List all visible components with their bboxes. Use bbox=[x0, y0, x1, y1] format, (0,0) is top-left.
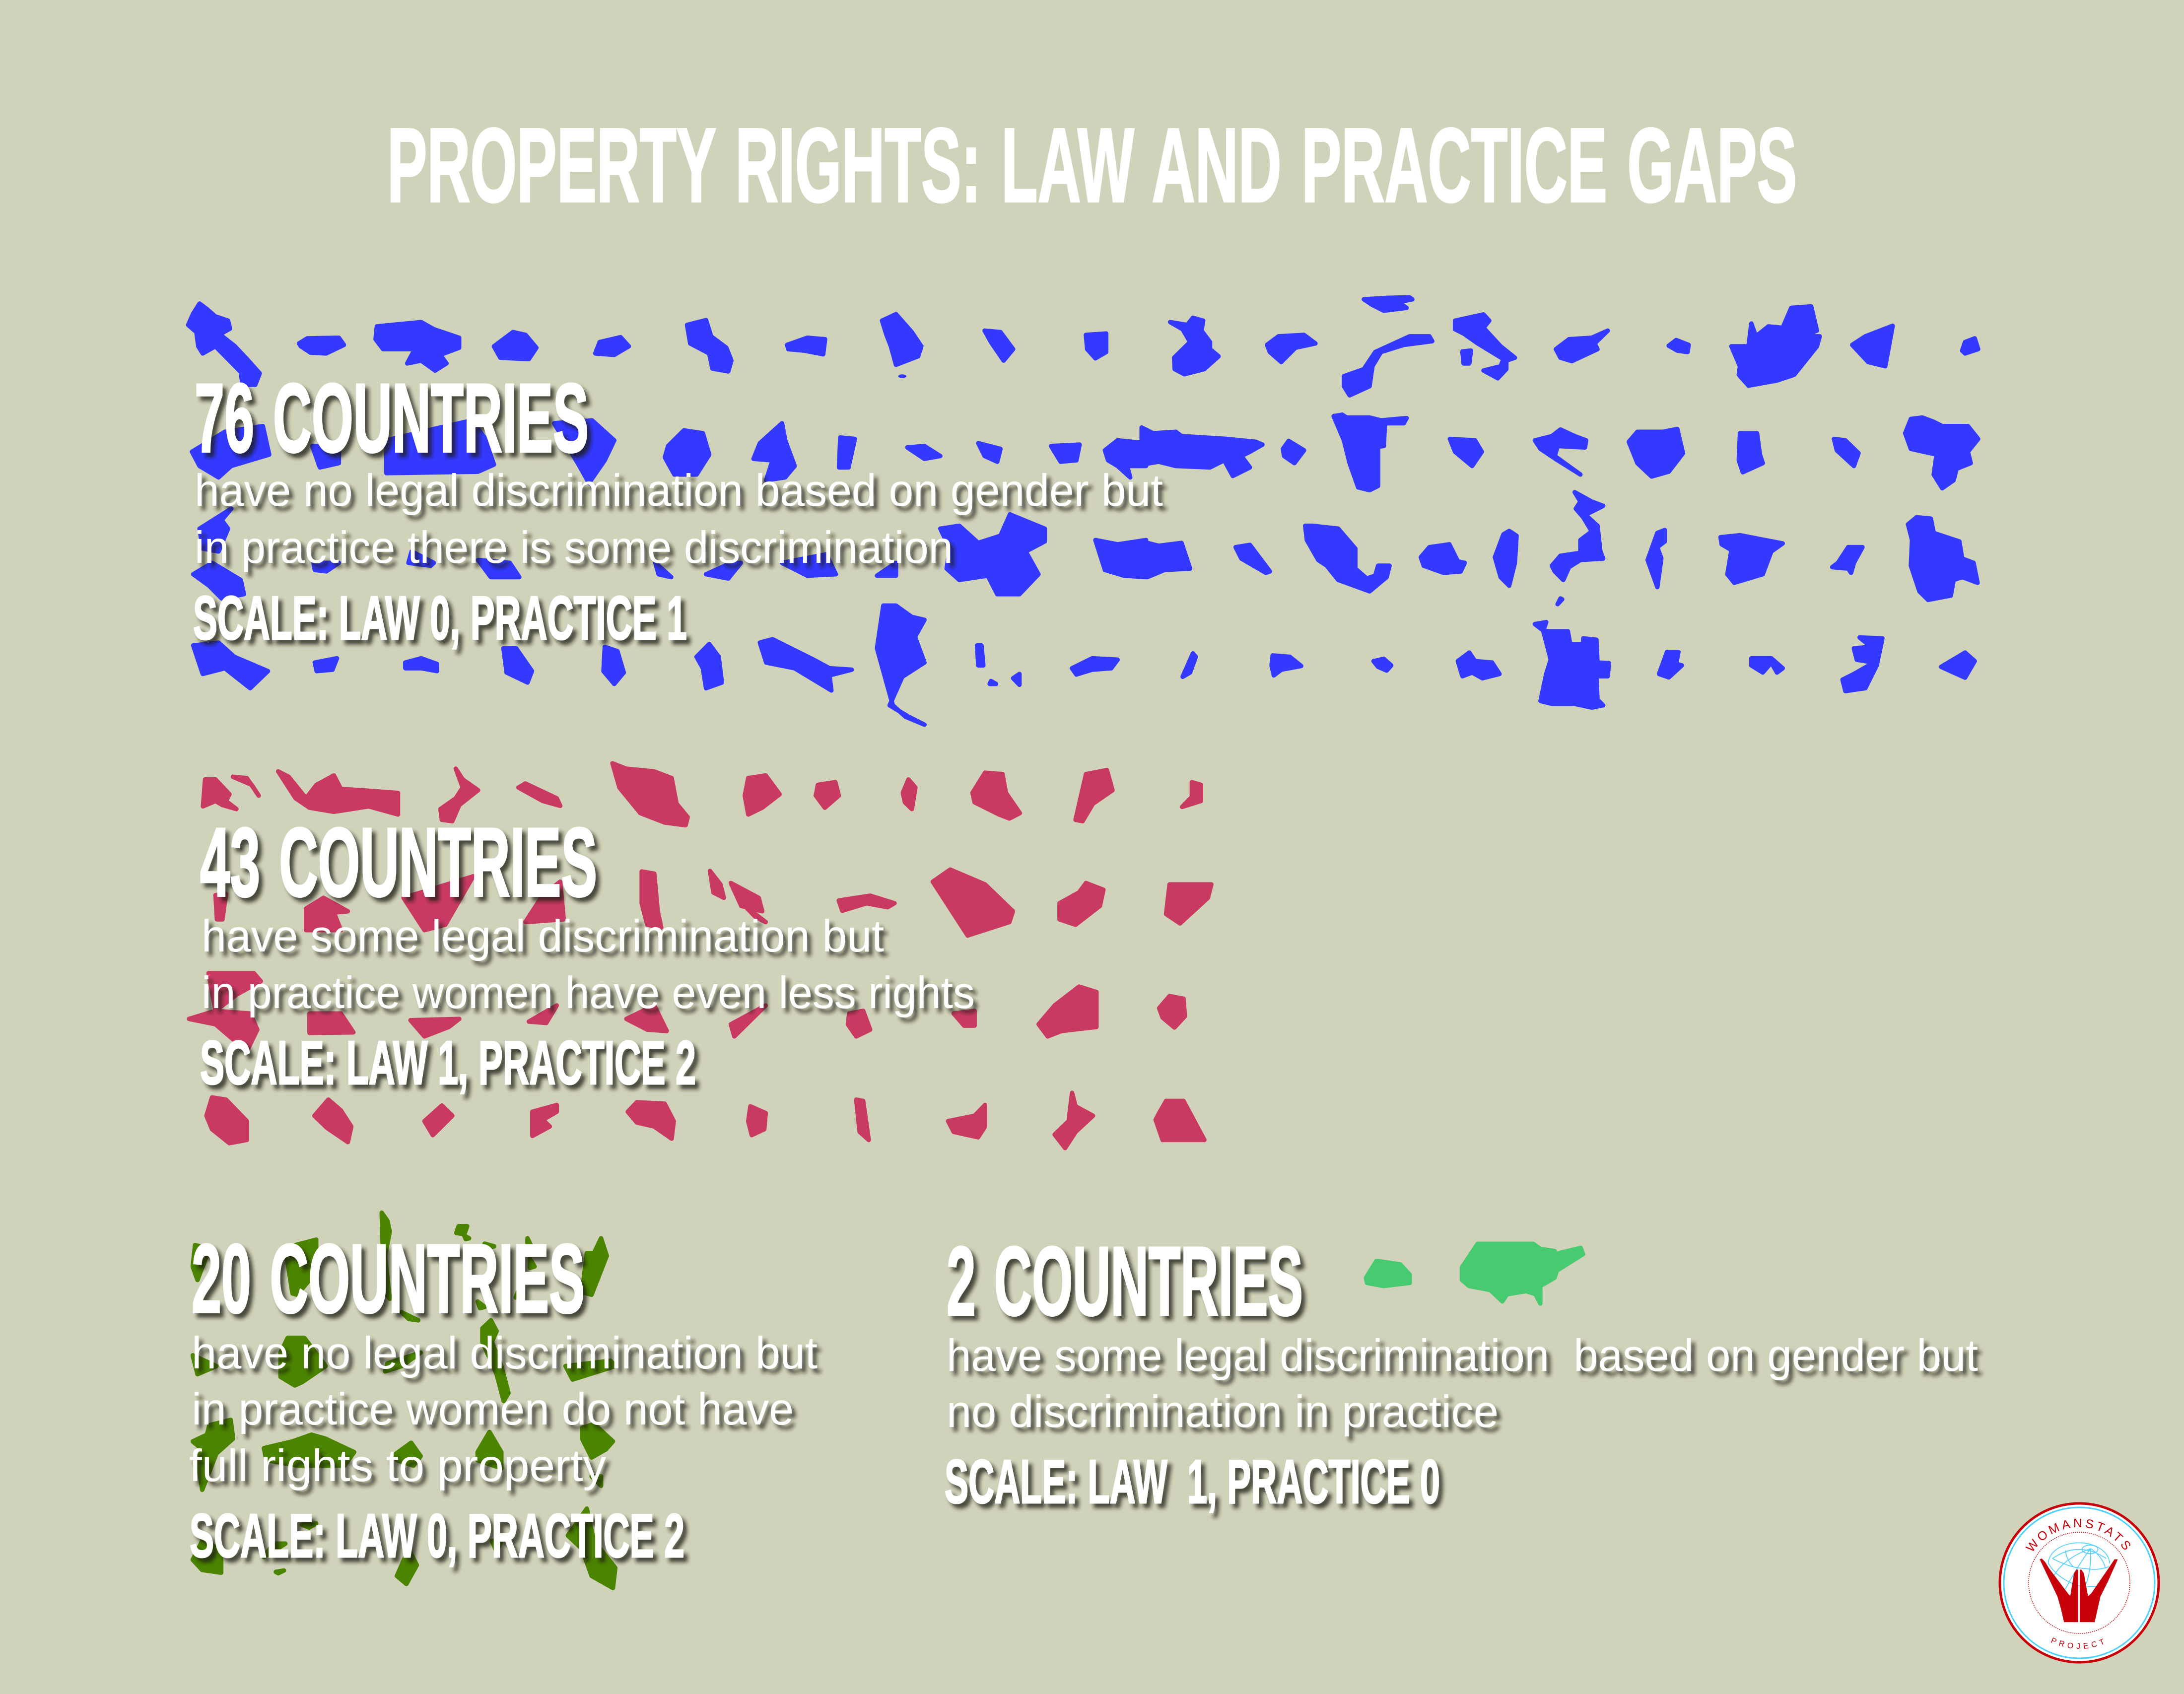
logo text: PROJECT: PROJECT bbox=[2051, 1637, 2104, 1649]
country silhouettes: 20 green bbox=[193, 1213, 615, 1588]
text block: 20 countries: have no legal discrimination but bbox=[192, 1328, 818, 1378]
text block: 2 countries bbox=[945, 1226, 1978, 1516]
panel: 20 countries bbox=[189, 1213, 818, 1588]
text block: 43 countries: have some legal discrimination but bbox=[202, 911, 884, 961]
text block: 2 countries: 2 COUNTRIES bbox=[947, 1226, 1303, 1336]
text block: 76 countries: in practice there is some discrimination bbox=[195, 523, 953, 573]
text block: 76 countries: SCALE: LAW 0, PRACTICE 1 bbox=[193, 584, 687, 653]
text block: 43 countries bbox=[200, 808, 975, 1097]
text block: 2 countries: no discrimination in practice bbox=[947, 1387, 1499, 1437]
text block: 43 countries: in practice women have even less rights bbox=[202, 968, 975, 1018]
text block: 20 countries bbox=[189, 1224, 818, 1570]
text block: 20 countries: in practice women do not have bbox=[192, 1384, 794, 1434]
text block: 43 countries: SCALE: LAW 1, PRACTICE 2 bbox=[200, 1029, 696, 1097]
text block: 20 countries: SCALE: LAW 0, PRACTICE 2 bbox=[190, 1502, 684, 1570]
text block: 43 countries: 43 COUNTRIES bbox=[200, 808, 597, 917]
text block: 20 countries: full rights to property bbox=[189, 1441, 607, 1491]
panel: 2 countries bbox=[945, 1226, 1978, 1516]
text block: 76 countries bbox=[193, 363, 1163, 653]
icon: globe bbox=[2048, 1543, 2110, 1590]
country silhouettes: 43 crimson bbox=[189, 763, 1211, 1148]
text block: 76 countries: have no legal discrimination based on gender but bbox=[195, 466, 1163, 516]
text block: 20 countries: 20 COUNTRIES bbox=[192, 1224, 585, 1333]
country silhouettes: 2 light green bbox=[1366, 1244, 1583, 1303]
panel: 76 countries bbox=[188, 297, 1978, 725]
panel: 43 countries bbox=[189, 763, 1211, 1148]
logo text: WOMANSTATS: WOMANSTATS bbox=[2025, 1519, 2130, 1551]
icon: raised hands bbox=[2040, 1558, 2118, 1622]
logo: WomanStats Project bbox=[1998, 1502, 2160, 1664]
text block: 76 countries: 76 COUNTRIES bbox=[195, 363, 589, 473]
country silhouettes: 76 blue, right half bbox=[1142, 297, 1978, 708]
text block: 2 countries: SCALE: LAW 1, PRACTICE 0 bbox=[945, 1448, 1440, 1516]
country silhouettes: 76 blue, left half bbox=[188, 304, 1146, 725]
text block: 2 countries: have some legal discrimination based on gender but bbox=[947, 1331, 1978, 1381]
